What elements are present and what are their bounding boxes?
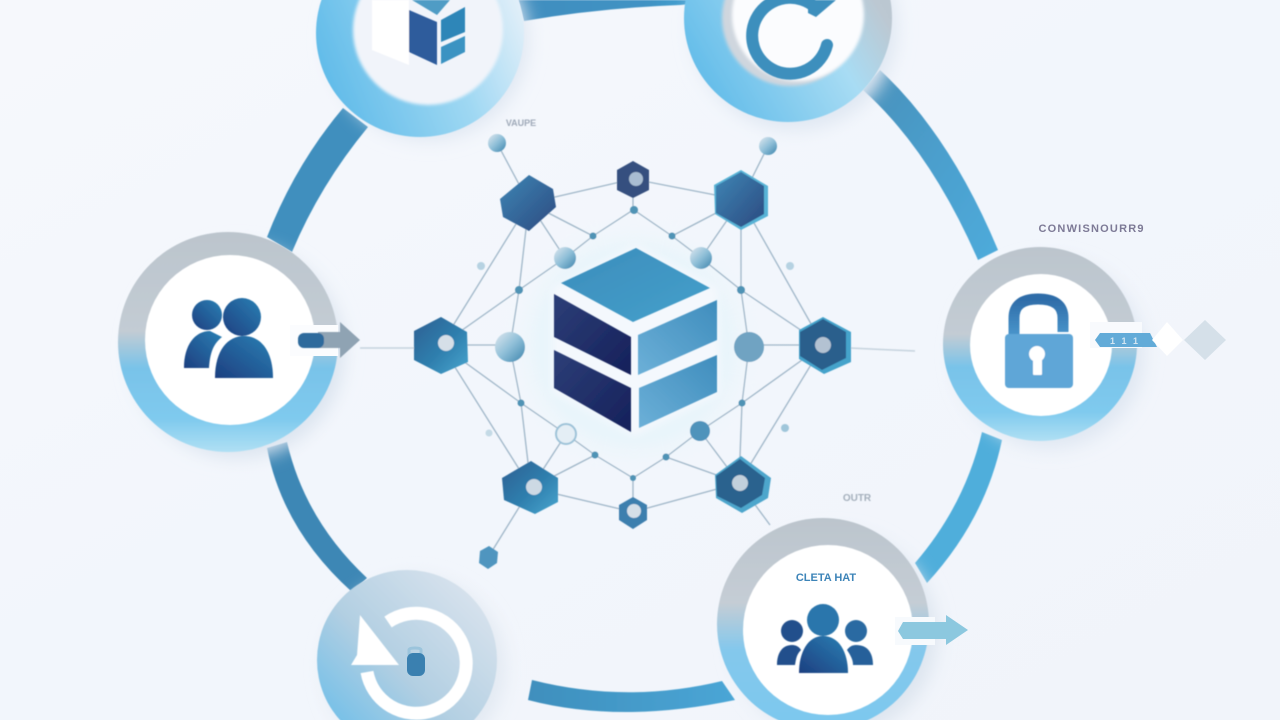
caption: top centre: VAUPE	[506, 118, 536, 128]
shadow	[328, 0, 528, 140]
inner disc	[970, 274, 1112, 416]
network links	[441, 143, 823, 556]
ring arc: upper right	[863, 70, 998, 260]
node: bottom-right people	[717, 518, 968, 720]
ring	[118, 232, 338, 452]
central network	[360, 134, 915, 569]
ring notch	[895, 617, 935, 645]
cube light lower face	[639, 355, 717, 428]
outer ring segments	[267, 0, 1002, 712]
node: bottom-left restore	[317, 570, 505, 720]
ring arc: upper left	[267, 108, 368, 252]
icon: two people	[184, 298, 273, 378]
ring	[943, 247, 1137, 441]
node: right lock	[943, 247, 1226, 448]
ring notch	[290, 325, 338, 356]
label inside disc: CLETA HAT	[796, 572, 856, 584]
icon: refresh arrow	[752, 0, 836, 74]
caption: right: CONWISNOURR9	[1038, 223, 1144, 235]
inner disc	[353, 0, 503, 105]
ring	[684, 0, 892, 122]
ring arc: lower left	[267, 442, 367, 592]
arrow	[898, 615, 968, 645]
inner disc	[145, 255, 315, 425]
inner disc	[743, 545, 913, 715]
arrow with label	[1095, 320, 1226, 360]
ring arc: lower right	[915, 432, 1002, 583]
arrow	[298, 322, 360, 358]
shadow	[956, 260, 1144, 448]
central cube	[552, 244, 720, 436]
cube top face	[561, 248, 710, 322]
icon: box	[372, 0, 465, 65]
cube dark lower face	[554, 350, 631, 432]
side connector lines	[360, 348, 915, 351]
small link nodes	[477, 206, 794, 481]
cube dark upper face	[554, 294, 631, 375]
icon: white restore arrow	[351, 613, 466, 713]
inner grey crescent	[722, 0, 858, 86]
cube light upper face	[638, 300, 717, 375]
icon: padlock	[1005, 299, 1073, 388]
hexagon nodes	[414, 161, 851, 569]
ring	[717, 518, 929, 720]
ball nodes	[488, 134, 777, 444]
icon: small padlock	[407, 648, 425, 676]
cube backing	[552, 244, 720, 436]
white diamond	[1152, 322, 1183, 356]
node: top-left cube	[316, 0, 528, 140]
ring arc: bottom	[528, 680, 735, 712]
disc	[317, 570, 497, 720]
node: top-right refresh	[684, 0, 897, 130]
grey diamond	[1184, 320, 1226, 360]
caption: bottom right: OUTR	[843, 493, 872, 504]
inner disc	[732, 0, 864, 81]
network glow	[499, 210, 769, 480]
ring	[316, 0, 524, 137]
shadow	[325, 578, 505, 720]
icon: three people	[777, 604, 873, 673]
shadow	[733, 533, 937, 720]
ring arc: top	[518, 0, 740, 21]
shadow	[132, 246, 344, 458]
ring notch	[1090, 322, 1142, 348]
arrow label: 1 1 1	[1110, 336, 1140, 346]
shadow	[693, 0, 897, 130]
node: left people	[118, 232, 360, 458]
